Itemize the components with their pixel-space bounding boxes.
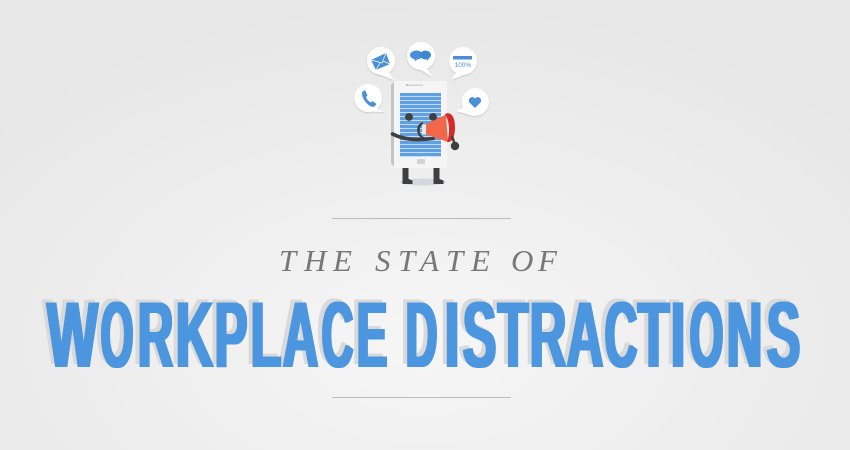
main title: R	[138, 282, 173, 387]
main title: S	[767, 282, 800, 387]
main title: C	[322, 282, 353, 387]
main title: I	[671, 282, 685, 387]
speech bubble: chat	[407, 42, 435, 77]
speech bubble: battery 100%	[449, 47, 477, 80]
eyes	[405, 113, 437, 121]
main title: T	[498, 282, 528, 387]
main title: P	[215, 282, 247, 387]
speech bubble: mail	[367, 47, 395, 80]
main title: D	[406, 282, 437, 387]
subtitle: THE STATE OF	[279, 243, 558, 278]
phone body	[391, 81, 447, 168]
main title: R	[530, 282, 566, 387]
arm	[392, 134, 433, 140]
speech bubble: heart	[456, 88, 489, 116]
main title: L	[251, 282, 281, 387]
main title: A	[567, 282, 603, 387]
main title: E	[357, 282, 387, 387]
main title: T	[638, 282, 669, 387]
top divider	[332, 218, 511, 219]
speech bubble: phone	[354, 84, 385, 112]
main title: S	[463, 282, 496, 387]
phone screen	[400, 93, 441, 156]
main title: K	[176, 282, 213, 387]
speech bubble: battery 100%: 100%	[455, 62, 472, 69]
main title: I	[445, 282, 459, 387]
illustration: phone with megaphone	[391, 81, 459, 186]
main title: W	[47, 282, 98, 387]
megaphone	[417, 113, 459, 150]
bottom divider	[332, 397, 511, 398]
ground shadow	[400, 178, 446, 186]
main title: O	[690, 282, 723, 387]
legs and feet	[402, 167, 444, 184]
main title: A	[283, 282, 318, 387]
main title: C	[605, 282, 637, 387]
main title: N	[727, 282, 762, 387]
main title: O	[101, 282, 133, 387]
